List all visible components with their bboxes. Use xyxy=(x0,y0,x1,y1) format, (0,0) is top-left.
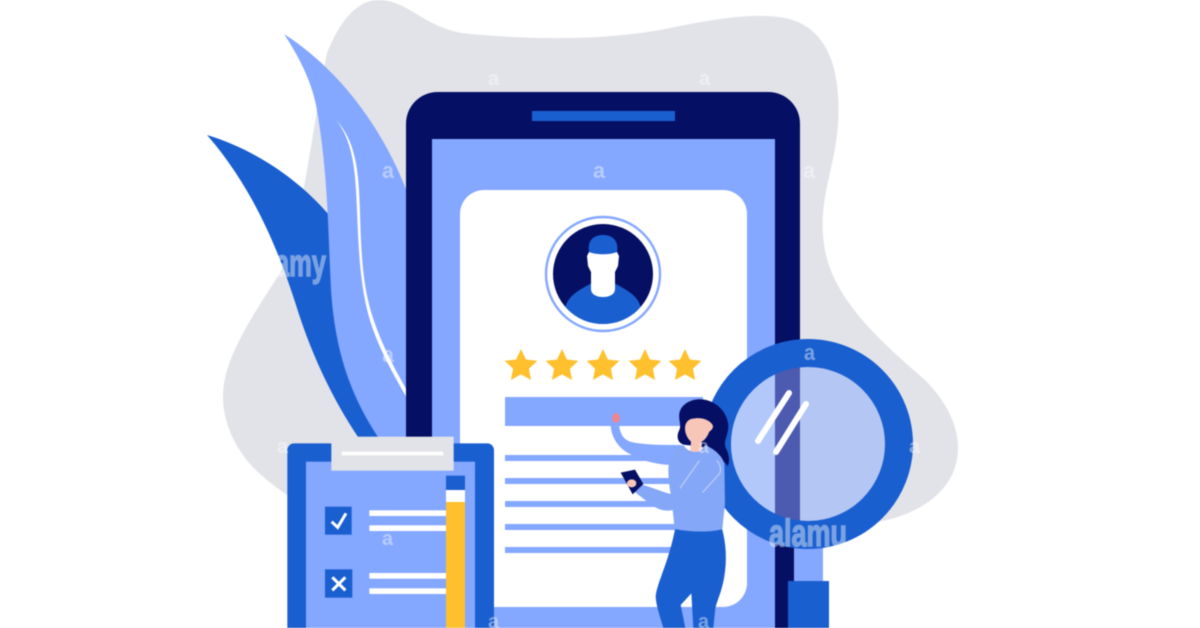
watermark: a xyxy=(803,158,816,183)
phone speaker xyxy=(532,111,675,121)
magnifying glass xyxy=(717,353,899,628)
board xyxy=(287,443,494,628)
dark leaf xyxy=(207,135,385,437)
grip xyxy=(788,581,829,628)
handle xyxy=(794,540,823,628)
profile card xyxy=(460,190,747,607)
light leaf xyxy=(284,34,410,437)
neck and face xyxy=(685,418,713,455)
watermark: a xyxy=(277,436,289,458)
illustration xyxy=(206,0,958,628)
glints xyxy=(758,393,806,452)
watermark: a xyxy=(593,158,606,183)
phone body xyxy=(406,92,800,628)
sweater xyxy=(633,445,725,532)
watermark xyxy=(275,68,921,628)
checkbox: approved xyxy=(325,507,352,535)
checklist lines 1 xyxy=(369,510,446,531)
raised hand xyxy=(612,413,620,423)
raised arm xyxy=(611,423,682,465)
watermark: a xyxy=(382,158,395,183)
woman xyxy=(611,399,729,628)
leaf vein xyxy=(336,120,408,400)
ring xyxy=(717,353,899,535)
avatar xyxy=(546,217,660,331)
checklist lines 2 xyxy=(369,573,446,594)
checkbox: rejected xyxy=(325,569,352,598)
paper xyxy=(306,462,475,628)
watermark: a xyxy=(699,68,711,90)
watermark: amy xyxy=(275,243,326,285)
watermark: a xyxy=(909,436,921,458)
watermark: a xyxy=(804,340,816,365)
holding hand xyxy=(627,479,636,487)
review text lines xyxy=(505,397,703,553)
watermark: a xyxy=(382,528,394,550)
sweater folds xyxy=(680,461,720,493)
phone in hand xyxy=(621,470,643,494)
phone screen xyxy=(432,139,775,628)
lens xyxy=(730,365,890,525)
watermark: alamu xyxy=(769,513,847,555)
pencil xyxy=(446,476,465,628)
clipboard xyxy=(287,437,494,628)
clip xyxy=(331,437,454,471)
watermark: a xyxy=(382,342,395,367)
pants xyxy=(656,528,726,628)
star rating xyxy=(505,349,701,380)
watermark: a xyxy=(698,436,710,458)
hair xyxy=(678,399,729,466)
watermark: a xyxy=(488,68,500,90)
phone xyxy=(406,92,800,628)
background blob xyxy=(223,0,958,522)
